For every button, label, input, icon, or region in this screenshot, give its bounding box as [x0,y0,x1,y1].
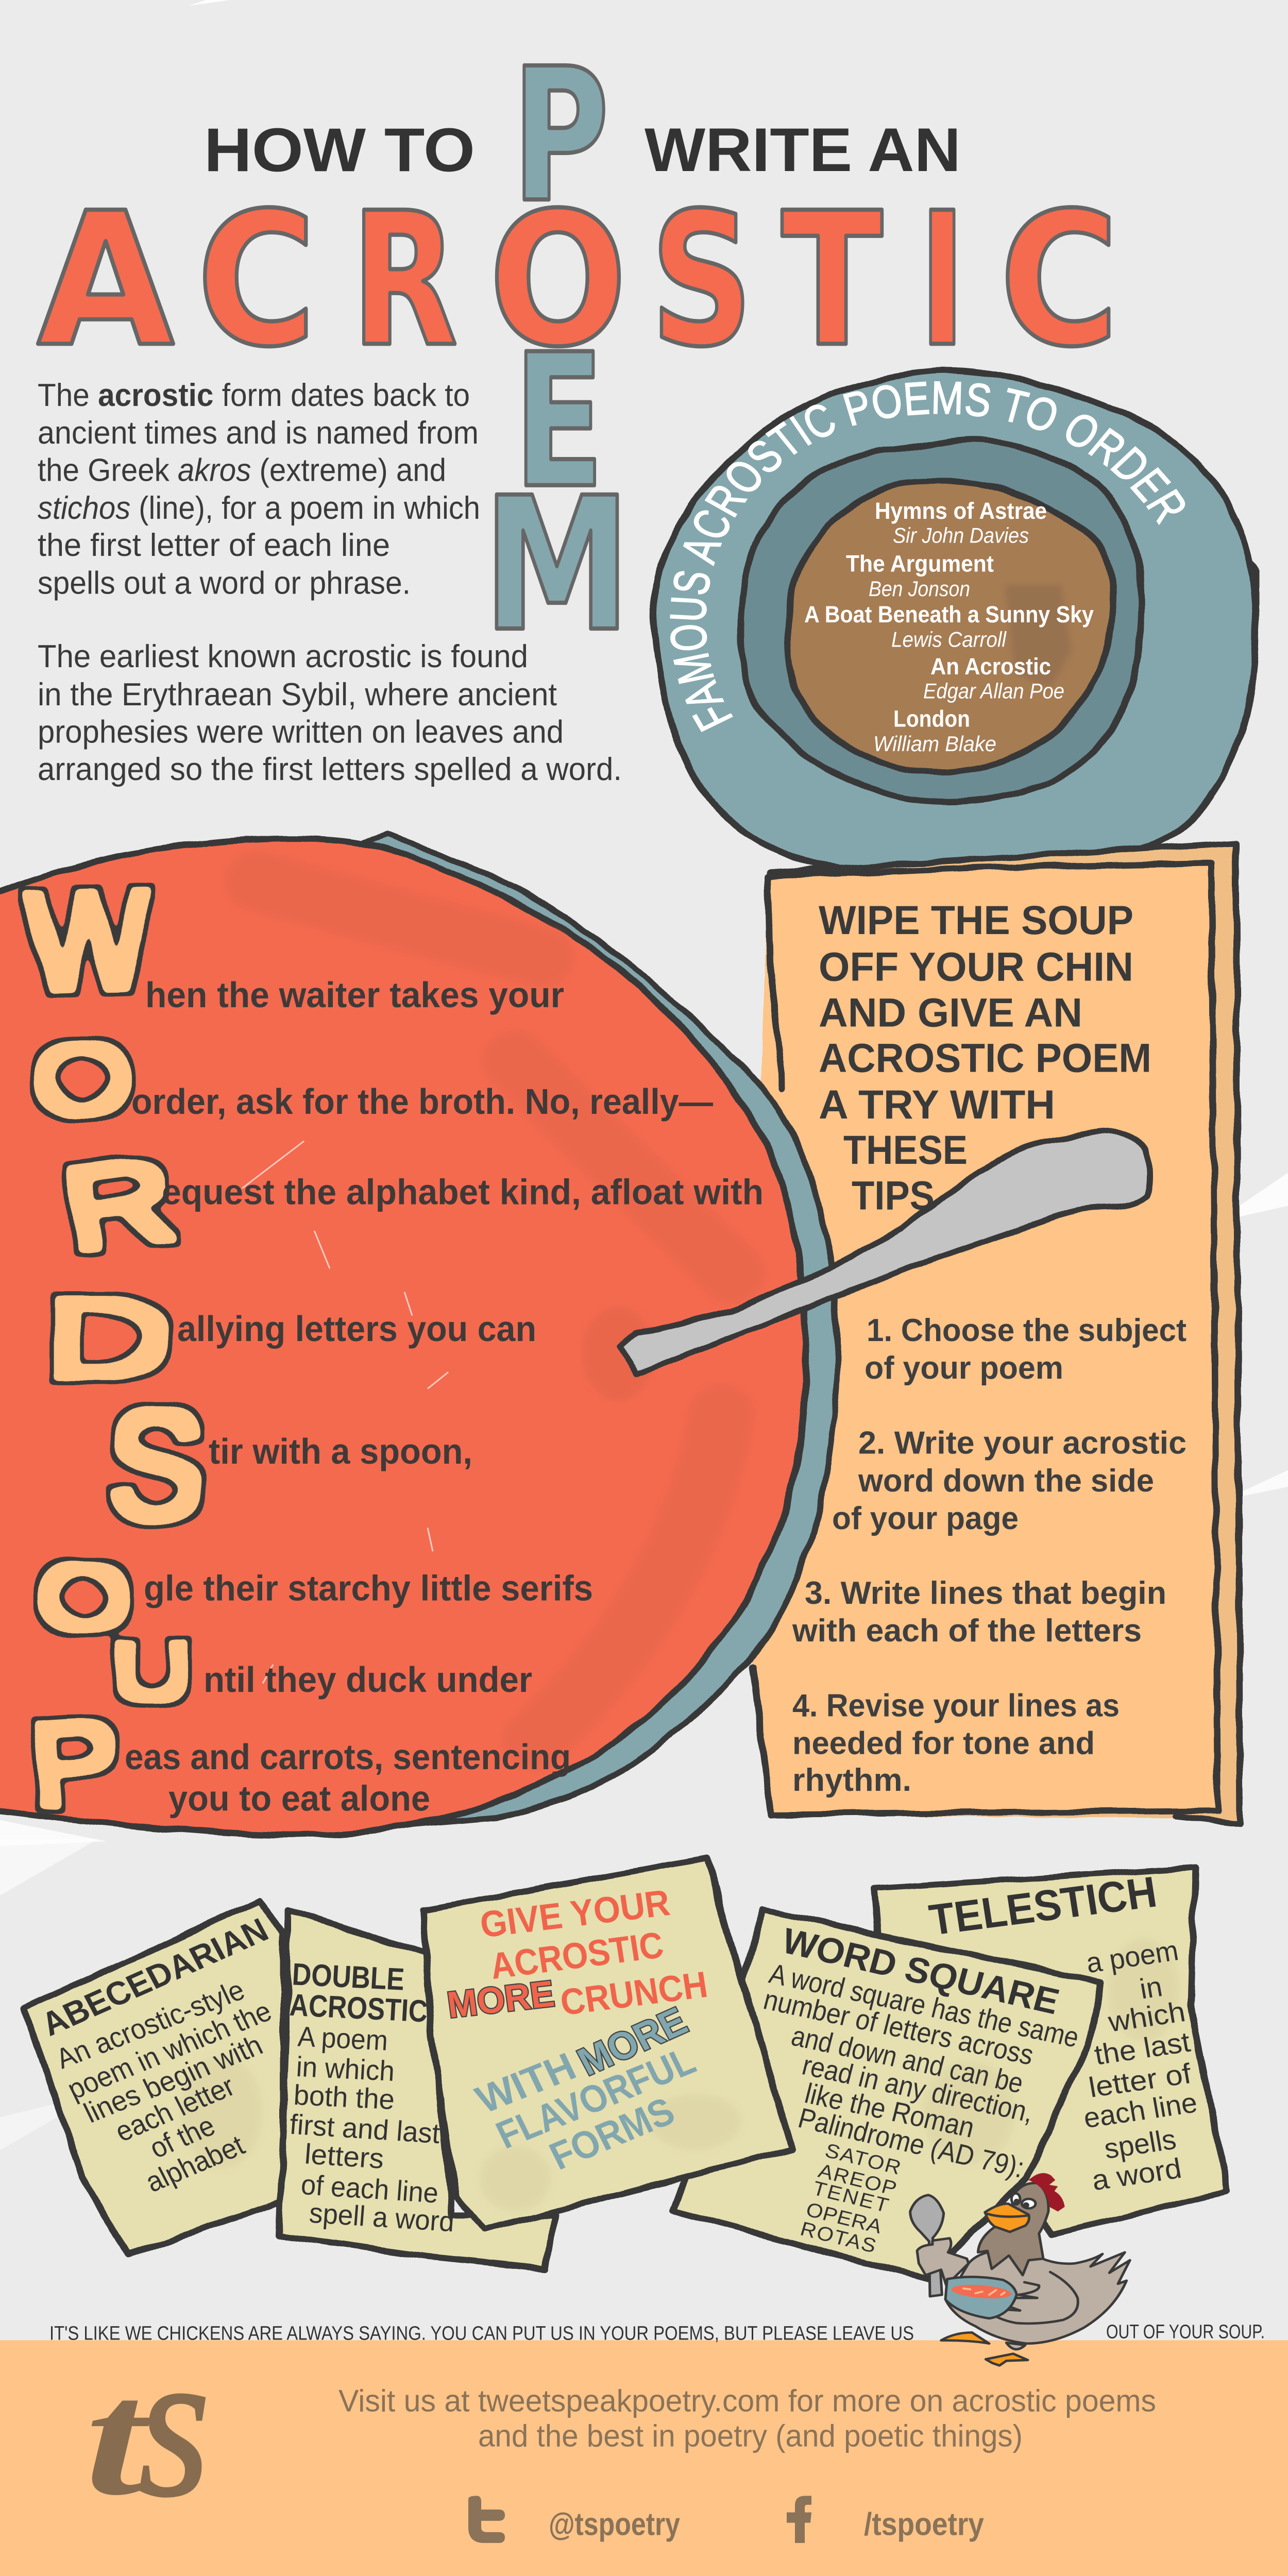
sator square: OPERA [804,2198,885,2238]
panel: tips sheet [752,839,1242,1826]
panel: soup bowl [0,835,1149,1835]
icon: facebook [787,2496,811,2543]
panel: word square [673,1910,1100,2278]
famous poems list: William Blake [873,732,996,756]
poem lines: you to eat alone [168,1778,430,1819]
famous poems list: The Argument [846,551,994,577]
tip 2: word down the side [858,1463,1154,1498]
tips heading: WIPE THE SOUP [819,897,1133,943]
big acrostic letters: U [112,1626,192,1717]
title: ACROSTIC: I [919,173,965,387]
telestich text: a word [1090,2153,1184,2197]
double acrostic text: of each line [300,2169,439,2209]
panel: abecedarian [25,1900,283,2255]
intro paragraph 1: the Greek akros (extreme) and [38,452,446,488]
flavorful forms heading: FORMS [543,2089,681,2178]
poem lines: ntil they duck under [204,1660,532,1700]
word square text: number of letters across [760,1984,1037,2071]
big acrostic letters [24,860,204,1831]
tip 2 [832,1425,1187,1536]
telestich text [1081,1935,1199,2197]
poem lines: eas and carrots, sentencing [125,1737,571,1777]
famous poems list [804,498,1094,756]
icon: cup handle [1145,548,1256,635]
centre sheet [423,1858,792,2229]
double acrostic text: spell a word [308,2197,455,2238]
poem lines: order, ask for the broth. No, really— [131,1082,713,1122]
title: ACROSTIC: T [782,173,884,387]
icon: twitter [468,2496,505,2543]
famous poems list: Sir John Davies [893,523,1029,548]
twitter handle: @tspoetry [549,2506,680,2542]
crunch heading: MORE [445,1973,556,2026]
abecedarian sheet [25,1900,283,2255]
abecedarian text [51,1974,277,2198]
title: vertical word POEM [483,29,631,672]
telestich text: which [1106,1996,1188,2038]
word square text: like the Roman [802,2078,977,2144]
footer text: Visit us at tweetspeakpoetry.com for more on acrostic poems [338,2384,1156,2418]
double acrostic sheet [279,1909,554,2269]
poem lines: gle their starchy little serifs [144,1568,593,1608]
big acrostic letters: W [24,860,154,1021]
abecedarian heading: ABECEDARIAN [36,1911,274,2043]
telestich text: in [1138,1971,1165,2005]
facebook handle: /tspoetry [864,2506,984,2542]
title: ACROSTIC [37,173,1119,387]
title: ACROSTIC: S [650,173,753,387]
telestich sheet [875,1867,1228,2234]
tips heading [819,897,1151,1218]
intro paragraph 1: spells out a word or phrase. [38,565,411,601]
tip 3: with each of the letters [792,1613,1142,1648]
double acrostic text: first and last [289,2109,441,2150]
title: how to write an: WRITE AN [645,115,961,184]
cup inner wall [741,439,1142,802]
famous poems list: Lewis Carroll [891,628,1007,652]
coffee surface [787,481,1113,772]
tips sheet background [752,839,1242,1826]
big acrostic letters: D [44,1276,173,1399]
intro paragraph 2: arranged so the first letters spelled a word. [38,751,622,787]
tip 3 [792,1574,1166,1648]
footer text: and the best in poetry (and poetic things) [478,2419,1023,2453]
word square text [760,1958,1082,2184]
title: vertical word POEM: M [483,458,631,672]
tips heading: AND GIVE AN [819,990,1082,1036]
intro paragraph 2: in the Erythraean Sybil, where ancient [38,676,557,713]
famous poems list: Ben Jonson [869,577,970,601]
crunch heading [445,1882,710,2026]
flavorful forms heading [469,1999,702,2178]
sator square: AREOP [816,2160,899,2200]
poem lines: allying letters you can [177,1309,536,1349]
word square text: read in any direction, [799,2049,1037,2129]
title: how to write an: HOW TO [204,115,475,184]
tips heading: THESE [843,1127,968,1173]
intro paragraph 1: the first letter of each line [38,527,390,563]
flavorful forms heading: FLAVORFUL [489,2039,702,2157]
word square text: Palindrome (AD 79): [795,2103,1028,2184]
intro paragraph 2: prophesies were written on leaves and [38,714,564,750]
abecedarian text: of the [145,2110,220,2164]
sator square [798,2139,904,2257]
poem lines: tir with a spoon, [209,1432,472,1471]
flavorful forms heading: MORE [571,1999,694,2083]
big acrostic letters: S [108,1379,204,1551]
spoon [620,1132,1149,1374]
title: ACROSTIC: C [197,174,316,387]
footer text [338,2384,1156,2453]
double acrostic text: both the [293,2079,396,2116]
footer band [0,2340,1288,2576]
title: how to write an [204,115,961,184]
word square text: A word square has the same [766,1958,1082,2054]
crunch heading: GIVE YOUR [478,1882,672,1945]
tip 1: of your poem [865,1350,1063,1386]
double acrostic heading: DOUBLE [291,1957,405,1997]
big acrostic letters: P [26,1696,124,1831]
icon: ts logo: s [138,2305,210,2540]
flavorful forms heading: WITH [469,2044,582,2122]
intro paragraph 2: The earliest known acrostic is found [38,638,528,674]
icon: ts logo: t [85,2346,152,2529]
double acrostic heading: ACROSTIC [289,1988,429,2029]
curved cup title: FAMOUS ACROSTIC POEMS TO ORDER [670,381,1185,732]
tip 4: needed for tone and [792,1725,1095,1761]
title: ACROSTIC: C [999,174,1119,387]
telestich text: letter of [1087,2058,1194,2104]
sator square: SATOR [823,2139,904,2179]
icon: chicken with spoon and soup [910,2173,1130,2365]
famous poems list: Hymns of Astrae [875,498,1047,524]
panel: coffee cup [649,367,1259,866]
title: vertical word POEM: E [514,315,604,529]
cup body [654,371,1256,871]
tip 4: 4. Revise your lines as [792,1687,1120,1723]
sator square: ROTAS [798,2217,879,2257]
intro paragraph 2 [38,638,622,787]
telestich heading: TELESTICH [926,1867,1160,1944]
tip 2: 2. Write your acrostic [858,1425,1187,1461]
famous poems list: London [893,706,970,732]
famous poems list: Edgar Allan Poe [923,679,1064,703]
abecedarian text: An acrostic-style [51,1974,249,2075]
title: ACROSTIC: R [351,173,458,387]
famous poems list: An Acrostic [930,654,1051,680]
big acrostic letters: O [37,1546,131,1650]
poem lines: hen the waiter takes your [145,975,564,1015]
title: ACROSTIC: A [37,173,175,387]
panel: double acrostic [279,1909,554,2269]
poem lines: equest the alphabet kind, afloat with [162,1172,764,1212]
tip 1 [865,1312,1187,1386]
word square sheet [673,1910,1100,2278]
double acrostic text: A poem [297,2021,389,2057]
abecedarian text: alphabet [141,2129,250,2198]
tips heading: TIPS [852,1173,935,1218]
tips heading: A TRY WITH [819,1082,1055,1127]
telestich text: the last [1092,2026,1193,2071]
tips heading: OFF YOUR CHIN [819,944,1133,990]
big acrostic letters: R [55,1132,183,1276]
panel: give your acrostic more crunch [423,1858,792,2229]
bowl rim [361,835,837,1826]
double acrostic text: in which [295,2051,396,2087]
chicken caption: IT'S LIKE WE CHICKENS ARE ALWAYS SAYING. YOU CAN PUT US IN YOUR POEMS, BUT PLEASE LEAVE US [49,2322,914,2344]
intro paragraph 1 [38,377,480,601]
telestich text: each line [1081,2087,1199,2134]
title: vertical word POEM: P [512,29,609,243]
double acrostic text: letters [303,2139,385,2175]
intro paragraph 1: ancient times and is named from [38,415,479,451]
word square text: and down and can be [788,2020,1026,2099]
crunch heading: ACROSTIC [487,1924,666,1987]
double acrostic text [289,2021,455,2238]
word square heading: WORD SQUARE [778,1921,1063,2022]
soup surface [0,839,806,1835]
crunch heading: CRUNCH [557,1963,710,2023]
tip 4 [792,1687,1120,1798]
intro paragraph 1: The acrostic form dates back to [38,377,470,413]
famous poems list: A Boat Beneath a Sunny Sky [804,602,1094,628]
sator square: TENET [810,2177,891,2216]
tips heading: ACROSTIC POEM [819,1036,1151,1081]
abecedarian text: poem in which the [62,1995,277,2106]
double acrostic heading [289,1957,429,2029]
abecedarian text: each letter [110,2070,240,2148]
tip 4: rhythm. [792,1762,911,1798]
panel: telestich [875,1867,1228,2234]
poem lines [125,975,764,1819]
tip 2: of your page [832,1500,1019,1536]
intro paragraph 1: stichos (line), for a poem in which [38,489,480,526]
abecedarian text: lines begin with [79,2029,267,2129]
telestich text: a poem [1084,1935,1181,1979]
tip 1: 1. Choose the subject [867,1312,1187,1348]
title: ACROSTIC: O [489,174,627,387]
tip 3: 3. Write lines that begin [805,1574,1166,1611]
telestich text: spells [1102,2124,1178,2165]
big acrostic letters: O [33,1024,132,1134]
icon: ts logo [85,2305,210,2540]
